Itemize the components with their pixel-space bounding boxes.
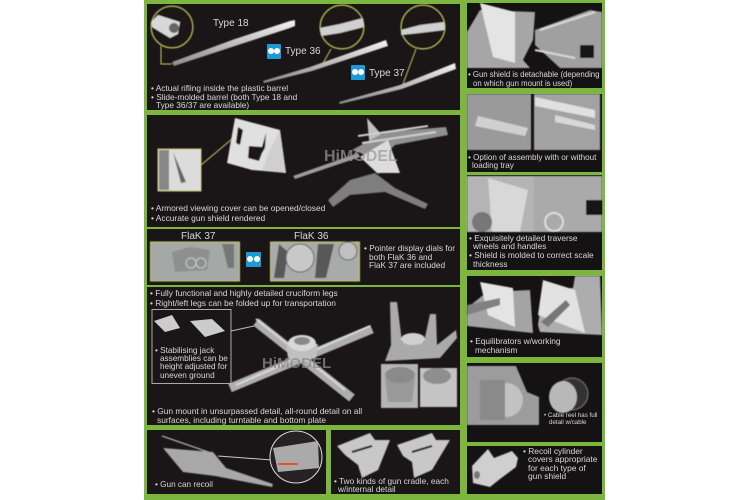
barrel: Type 37: [339, 5, 456, 104]
text: covers appropriate: [528, 454, 598, 464]
recoil inset: [218, 431, 322, 483]
panel: gun cradle: [331, 430, 460, 494]
icon: Type 36 badge: [267, 44, 281, 59]
text: legs: • Right/left legs can be folded up for transportation: [150, 298, 336, 308]
text: shield features: • Armored viewing cover can be opened/closed: [151, 203, 326, 213]
text: • Recoil cylinder: [523, 446, 583, 456]
panel: gun shield detachable: [467, 3, 602, 88]
panel: recoil cylinder: [467, 446, 602, 494]
panel: gun recoil: [147, 430, 326, 494]
shield model: [227, 118, 286, 173]
text: barrel features: Type 36/37 are available): [156, 100, 249, 110]
watermark: HiMODEL: [324, 148, 398, 165]
green frame: [144, 0, 605, 500]
text: legs: • Fully functional and highly detailed cruciform legs: [150, 288, 338, 298]
heading: FlaK 37: FlaK 37: [181, 231, 216, 242]
text: gun mount: • Gun mount in unsurpassed detail, all-round detail on all: [152, 406, 362, 416]
icon: badge: [246, 252, 261, 267]
cable reel: [549, 378, 588, 413]
panel: gun shield: [147, 115, 460, 227]
callout: jack assemblies: • Stabilising jack: [155, 346, 215, 355]
images: [467, 276, 602, 335]
label: Type 36: Type 36: [285, 46, 321, 57]
text: on which gun mount is used): [473, 79, 573, 88]
text: dials: • Pointer display dials for: [364, 243, 455, 253]
images: [467, 176, 602, 232]
text: recoil: • Gun can recoil: [155, 480, 213, 489]
text: barrel features: • Slide-molded barrel (both Type 18 and: [151, 92, 298, 102]
heading: Type 18: Type 18: [213, 18, 249, 29]
text: dials: FlaK 37 are included: [369, 260, 445, 270]
text: for each type of: [528, 463, 586, 473]
watermark: HiMODEL: [262, 355, 331, 372]
barrel: Type 36: [263, 5, 388, 83]
icon: Type 37 badge: [351, 65, 365, 80]
panel: traverse wheels: [467, 175, 602, 270]
panel: barrels: [147, 4, 460, 110]
text: barrel features: • Actual rifling inside the plastic barrel: [151, 83, 288, 93]
text: cradle: • Two kinds of gun cradle, each: [334, 476, 449, 486]
images: [467, 3, 602, 68]
text: gun mount: surfaces, including turntable and bottom plate: [157, 415, 326, 425]
text: cradle: w/internal detail: [337, 484, 396, 494]
text: • Shield is molded to correct scale: [469, 250, 594, 260]
text: • Equilibrators w/working: [470, 336, 561, 346]
cylinder model: [472, 449, 518, 487]
barrel: Type 18: [151, 6, 295, 66]
drum image: [467, 366, 539, 425]
callout: jack assemblies: height adjusted for: [160, 362, 228, 371]
gun model: [293, 118, 448, 209]
text: loading tray: [472, 161, 515, 170]
text: • Exquisitely detailed traverse: [469, 233, 578, 243]
panel: cable reel: [467, 363, 602, 442]
mount detail views: [381, 302, 457, 408]
callout: jack assemblies: uneven ground: [160, 371, 215, 380]
text: mechanism: [475, 345, 518, 355]
cruciform mount: [230, 319, 372, 398]
heading: FlaK 36: FlaK 36: [294, 231, 329, 242]
panel: cruciform legs: [147, 287, 460, 425]
image: FlaK 37 dial: [150, 242, 240, 281]
label: Type 37: Type 37: [369, 68, 405, 79]
image: FlaK 36 dial: [270, 242, 360, 281]
text: • Option of assembly with or without: [468, 153, 597, 162]
images: [467, 94, 600, 150]
text: shield features: • Accurate gun shield rendered: [151, 213, 266, 223]
text: • Cable reel has full: [544, 412, 597, 419]
callout: jack assemblies: [152, 310, 254, 384]
callout: jack assemblies: assemblies can be: [160, 354, 228, 363]
inset: viewing cover: [158, 134, 238, 191]
panel: loading tray: [467, 94, 602, 172]
text: detail w/cable: [549, 419, 587, 426]
text: • Gun shield is detachable (depending: [468, 70, 599, 79]
gun: [162, 436, 273, 487]
text: dials: both FlaK 36 and: [369, 252, 433, 262]
text: thickness: [473, 259, 508, 269]
text: wheels and handles: [472, 241, 546, 251]
panel: equilibrators: [467, 276, 602, 357]
panel: pointer dials: [147, 229, 460, 285]
cradle models: [337, 433, 450, 478]
text: gun shield: [528, 471, 567, 481]
